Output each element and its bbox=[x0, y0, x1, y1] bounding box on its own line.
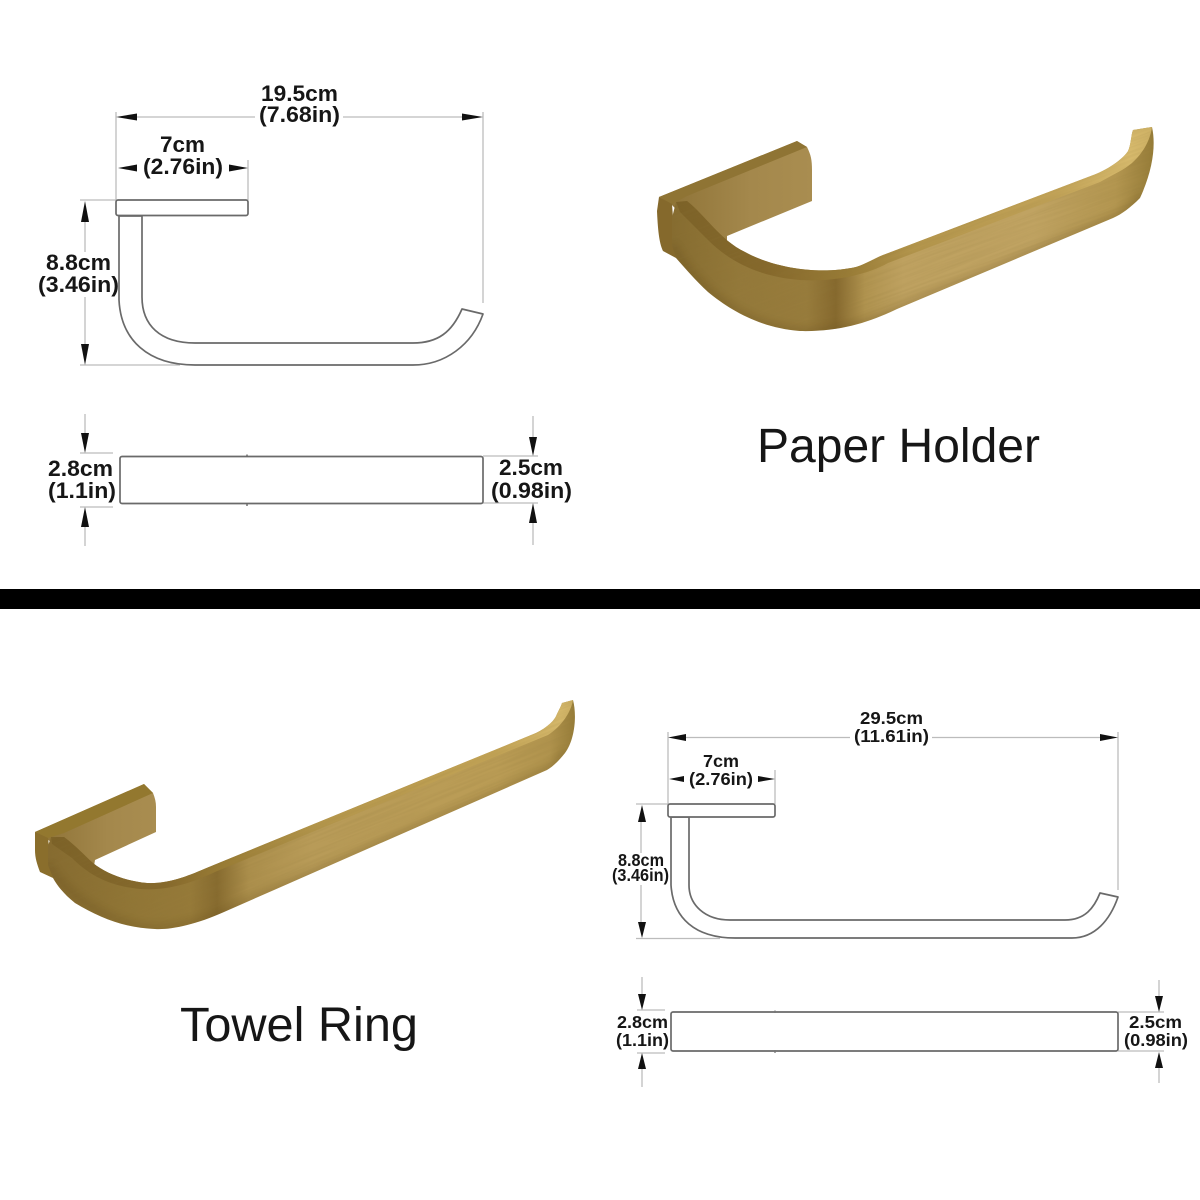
dimension labels: 19.5cm bbox=[261, 81, 338, 106]
product photo: paper holder bbox=[657, 127, 1154, 332]
diagram: towel ring front view bbox=[612, 708, 1118, 938]
dimension labels: (7.68in) bbox=[259, 102, 340, 127]
dimension labels bbox=[616, 1012, 1188, 1050]
dimension labels: 2.8cm bbox=[617, 1012, 668, 1032]
dimension labels: 2.5cm bbox=[499, 455, 563, 480]
dimension labels: (3.46in) bbox=[38, 272, 119, 297]
dimension labels: (0.98in) bbox=[1124, 1030, 1188, 1050]
dimension labels: 8.8cm bbox=[46, 250, 111, 275]
towel ring outline bbox=[668, 804, 1118, 938]
dimension labels: 7cm bbox=[703, 751, 739, 771]
diagram: paper holder front view bbox=[38, 81, 483, 365]
label: towel ring: Towel Ring bbox=[180, 999, 418, 1052]
divider bar bbox=[0, 589, 1200, 609]
dimension labels: 7cm bbox=[160, 132, 205, 157]
product photo: towel ring bbox=[35, 700, 575, 930]
dimension labels: (3.46in) bbox=[612, 865, 669, 885]
dimension labels: 29.5cm bbox=[860, 708, 923, 728]
holder outline bbox=[116, 200, 483, 365]
label: paper holder: Paper Holder bbox=[757, 420, 1040, 473]
dimension labels: (2.76in) bbox=[143, 154, 223, 179]
dimension labels bbox=[38, 81, 340, 297]
dimension labels: (1.1in) bbox=[616, 1030, 669, 1050]
dimension labels: (11.61in) bbox=[854, 726, 929, 746]
diagram: towel ring side view bbox=[616, 977, 1188, 1087]
diagram: paper holder side view bbox=[48, 414, 572, 546]
dimension labels: (1.1in) bbox=[48, 478, 116, 503]
dimension labels: (0.98in) bbox=[491, 478, 572, 503]
dimension labels: (2.76in) bbox=[689, 769, 753, 789]
dimension labels bbox=[48, 455, 572, 503]
dimension labels bbox=[612, 708, 929, 885]
dimension labels: 2.5cm bbox=[1129, 1012, 1182, 1032]
dimension labels: 2.8cm bbox=[48, 456, 113, 481]
dimension labels: 8.8cm bbox=[618, 850, 664, 870]
